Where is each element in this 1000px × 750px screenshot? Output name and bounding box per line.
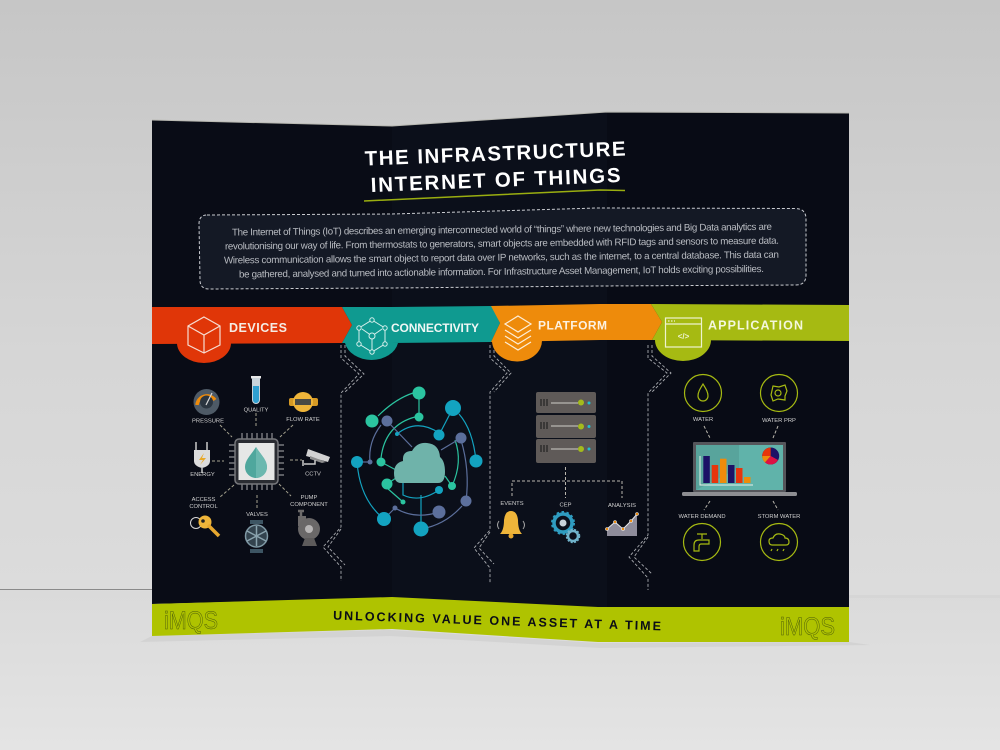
right panel [607,112,849,608]
footer band [152,597,849,642]
connectivity band [342,306,500,343]
title [364,137,626,197]
blue links [357,408,476,529]
label: access control: ACCESS [192,497,216,503]
devices tab [177,343,231,363]
icon: bell [498,511,524,538]
icon: cube [188,317,220,353]
connectivity network diagram [351,386,482,536]
icon: pressure gauge [194,389,220,415]
slate nodes [368,416,472,518]
label: pump component [290,495,328,508]
connector dashes [704,426,778,510]
label: water prp: WATER PRP [762,418,796,424]
icon: tap circle [684,524,720,560]
blue nodes [351,400,482,536]
intro text box [199,208,806,289]
label: access control [189,497,218,510]
footer slogan: UNLOCKING VALUE ONE ASSET AT A TIME [333,609,661,633]
middle panel [392,112,607,608]
intro paragraph: be gathered, analysed and turned into actionable information. For Infrastructure Asset Management, IoT holds exciting possibilities. [239,264,764,280]
green nodes [366,386,456,504]
slate links [357,421,467,529]
label: flow rate: FLOW RATE [286,417,320,423]
icon: chip with water drop [229,433,284,490]
icon: network cube [357,318,387,354]
ribbon: platform [491,304,662,362]
icon: gears [552,512,580,542]
footer band background [152,597,849,642]
label: cep: CEP [560,502,572,508]
platform band [491,304,662,342]
devices label: DEVICES [229,321,287,335]
ribbon: connectivity [342,306,500,360]
icon: analysis chart [606,512,638,536]
floor [0,590,1000,750]
label: analysis: ANALYSIS [608,503,636,509]
title line 1: THE INFRASTRUCTURE [364,137,626,170]
icon: browser window [666,318,702,347]
green links [378,393,458,502]
floor edge line [0,588,152,590]
icon: laptop with charts [682,442,797,496]
platform label: PLATFORM [538,318,607,332]
label: water demand: WATER DEMAND [678,514,726,520]
dashed box [199,208,806,289]
intro paragraph: revolutionising our way of life. From thermostats to generators, smart objects are embedded with RFID tags and sensors to measure data. [225,236,779,252]
label: valves: VALVES [246,512,268,518]
icon: server stack [536,392,596,463]
icon: energy plug [194,442,210,473]
intro paragraph [224,222,779,280]
ribbon: application [651,304,849,361]
label: water: WATER [693,417,713,423]
intro paragraph: The Internet of Things (IoT) describes an emerging interconnected world of “things” where new technologies and Big Data analytics are [232,222,773,238]
icon: test tube [251,376,261,404]
logo: left iMQS: iMQS [164,607,218,635]
background wall [0,0,1000,595]
application band [651,304,849,341]
application tab [655,340,711,361]
flyer sheet [152,112,849,608]
label: energy: ENERGY [190,472,215,478]
connectivity tab [345,343,398,360]
connector dashes [212,413,302,510]
devices band [152,307,352,344]
icon: storm cloud circle [760,524,798,560]
devices diagram [189,376,330,553]
icon: cctv camera [303,449,330,466]
label: storm water: STORM WATER [758,514,800,520]
icon: cloud [394,443,445,483]
label: events: EVENTS [500,501,524,507]
title underline [364,190,625,201]
platform tab [492,340,542,362]
left panel [152,120,392,604]
icon: valve wheel [246,520,268,553]
icon: water circle [684,374,722,412]
application label: APPLICATION [708,318,803,332]
title line 2: INTERNET OF THINGS [370,164,621,197]
connector tree [512,467,622,498]
application diagram [678,374,800,560]
icon: water prp circle [760,374,798,412]
icon: flow meter [289,392,318,412]
label: access control: CONTROL [189,504,218,510]
label: quality: QUALITY [244,408,269,414]
icon: stacked layers [505,316,531,350]
icon: key [190,516,219,536]
dashed dividers [323,345,671,590]
icon: pump [298,511,320,546]
paper shadow [140,630,870,648]
label: pressure: PRESSURE [192,418,224,424]
label: pump component: COMPONENT [290,502,328,508]
logo: right iMQS: iMQS [780,613,835,641]
label: cctv: CCTV [305,472,321,478]
platform diagram [498,392,638,542]
ribbon: devices [152,307,352,363]
label: pump component: PUMP [301,495,318,501]
intro paragraph: Wireless communication allows the smart object to report data over IP networks, such as the internet, to a central database. This data can [224,250,779,266]
icon: browser window: </> [678,332,690,341]
paper top edge [152,112,849,126]
connectivity label: CONNECTIVITY [391,321,479,335]
